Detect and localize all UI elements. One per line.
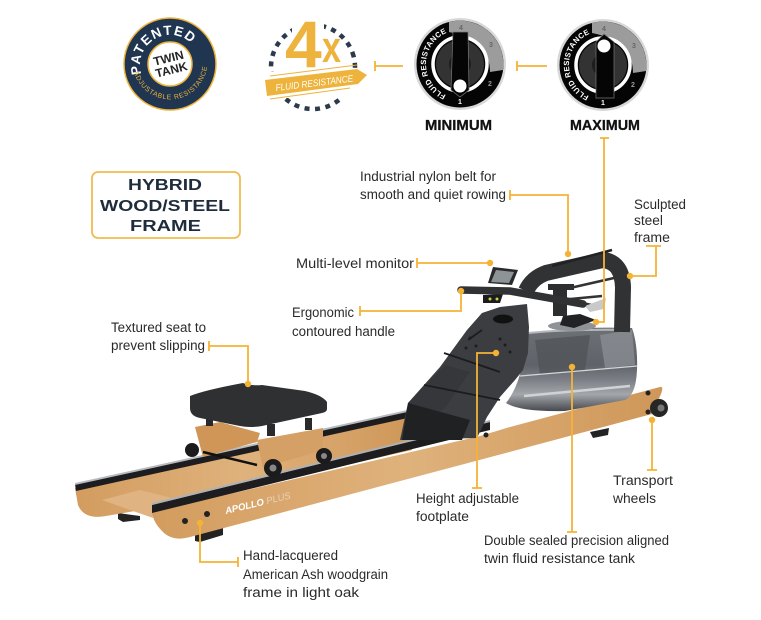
badge: patented twin tank: TWIN	[152, 48, 185, 69]
text: belt: smooth and quiet rowing	[360, 187, 506, 202]
leader: tank	[567, 364, 577, 532]
seat	[190, 383, 327, 427]
near rail wood	[152, 387, 662, 539]
text: belt	[360, 169, 506, 202]
monitor	[488, 267, 518, 285]
badge: 4x fluid resistance	[259, 7, 367, 121]
text: woodgrain: Hand-lacquered	[243, 548, 338, 563]
callout: hybrid wood/steel frame: WOOD/STEEL	[100, 198, 230, 215]
leader: steel frame	[627, 246, 661, 279]
badge: patented twin tank	[123, 17, 217, 111]
dial: minimum: FLUID RESISTANCE	[420, 28, 446, 100]
text: steel frame: Sculpted	[634, 197, 686, 212]
rowing machine	[75, 250, 668, 542]
text: woodgrain	[243, 548, 388, 600]
dial: maximum: 3	[632, 43, 636, 50]
handle	[461, 290, 583, 304]
callout: hybrid wood/steel frame: FRAME	[130, 218, 201, 235]
label: minimum: MINIMUM	[425, 118, 492, 134]
tank cap and shaft	[548, 321, 596, 331]
near rail black bar	[152, 422, 490, 513]
text: steel frame: steel	[634, 213, 663, 228]
footplate	[400, 304, 529, 440]
text: tank	[484, 533, 669, 566]
text: footplate: Height adjustable	[416, 491, 519, 506]
dial: maximum: 2	[631, 82, 635, 89]
dial: minimum: 2	[488, 81, 492, 88]
badge: patented twin tank: TANK	[154, 59, 189, 81]
badge: patented twin tank: ADJUSTABLE RESISTANCE	[134, 66, 207, 100]
transport wheel	[650, 399, 668, 417]
text: tank: twin fluid resistance tank	[484, 551, 635, 566]
front plank	[102, 490, 172, 518]
far rail	[75, 413, 412, 517]
connector: 4x to minimum	[375, 61, 403, 71]
text: transport wheels: Transport	[613, 473, 673, 488]
far rail black bar	[75, 410, 412, 491]
leader: handle	[360, 288, 464, 316]
leader: woodgrain	[197, 520, 238, 567]
dial: maximum: 4	[602, 26, 606, 33]
dial: minimum	[414, 18, 506, 110]
text: tank: Double sealed precision aligned	[484, 533, 669, 548]
callout: hybrid wood/steel frame	[92, 172, 240, 238]
rear feet	[118, 428, 609, 542]
text: handle	[292, 305, 395, 339]
text: steel frame	[634, 197, 686, 245]
dial: maximum: 1	[601, 100, 605, 107]
text: handle: contoured handle	[292, 324, 395, 339]
text: steel frame: frame	[634, 230, 670, 245]
text: seat: prevent slipping	[111, 338, 205, 353]
brand: APOLLO PLUS	[223, 490, 293, 517]
text: woodgrain: American Ash woodgrain	[243, 567, 388, 582]
dial: minimum: 4	[459, 25, 463, 32]
tank	[506, 328, 637, 411]
dial: maximum	[557, 19, 649, 111]
text: seat: Textured seat to	[111, 320, 206, 335]
text: woodgrain: frame in light oak	[243, 585, 359, 600]
leader: maximum to shaft	[593, 138, 609, 325]
leader: footplate	[472, 350, 499, 488]
dial: minimum: 1	[458, 99, 462, 106]
bolts	[182, 390, 650, 524]
dial: maximum: FLUID RESISTANCE	[564, 29, 590, 100]
text: footplate	[416, 491, 519, 524]
leader: monitor	[417, 258, 493, 268]
arch frame	[526, 260, 623, 332]
badge: patented twin tank: PATENTED	[131, 26, 194, 75]
text: belt: Industrial nylon belt for	[360, 169, 497, 184]
text: handle: Ergonomic	[292, 305, 354, 320]
text: seat	[111, 320, 206, 353]
badge: 4x fluid resistance: FLUID RESISTANCE	[275, 73, 354, 94]
dial: minimum: 3	[489, 42, 493, 49]
label: maximum: MAXIMUM	[570, 118, 640, 134]
callout: hybrid wood/steel frame: HYBRID	[128, 177, 202, 194]
leader: belt	[510, 190, 571, 257]
text: transport wheels: wheels	[612, 491, 656, 506]
leader: transport wheels	[647, 417, 657, 470]
badge: 4x fluid resistance: 4	[285, 7, 322, 81]
connector: minimum to maximum	[517, 61, 547, 71]
seat carriage	[185, 416, 332, 477]
badge: 4x fluid resistance: x	[322, 23, 341, 72]
leader: seat	[209, 341, 251, 387]
text: transport wheels	[612, 473, 673, 506]
text: footplate: footplate	[416, 509, 469, 524]
text: monitor: Multi-level monitor	[296, 256, 415, 271]
